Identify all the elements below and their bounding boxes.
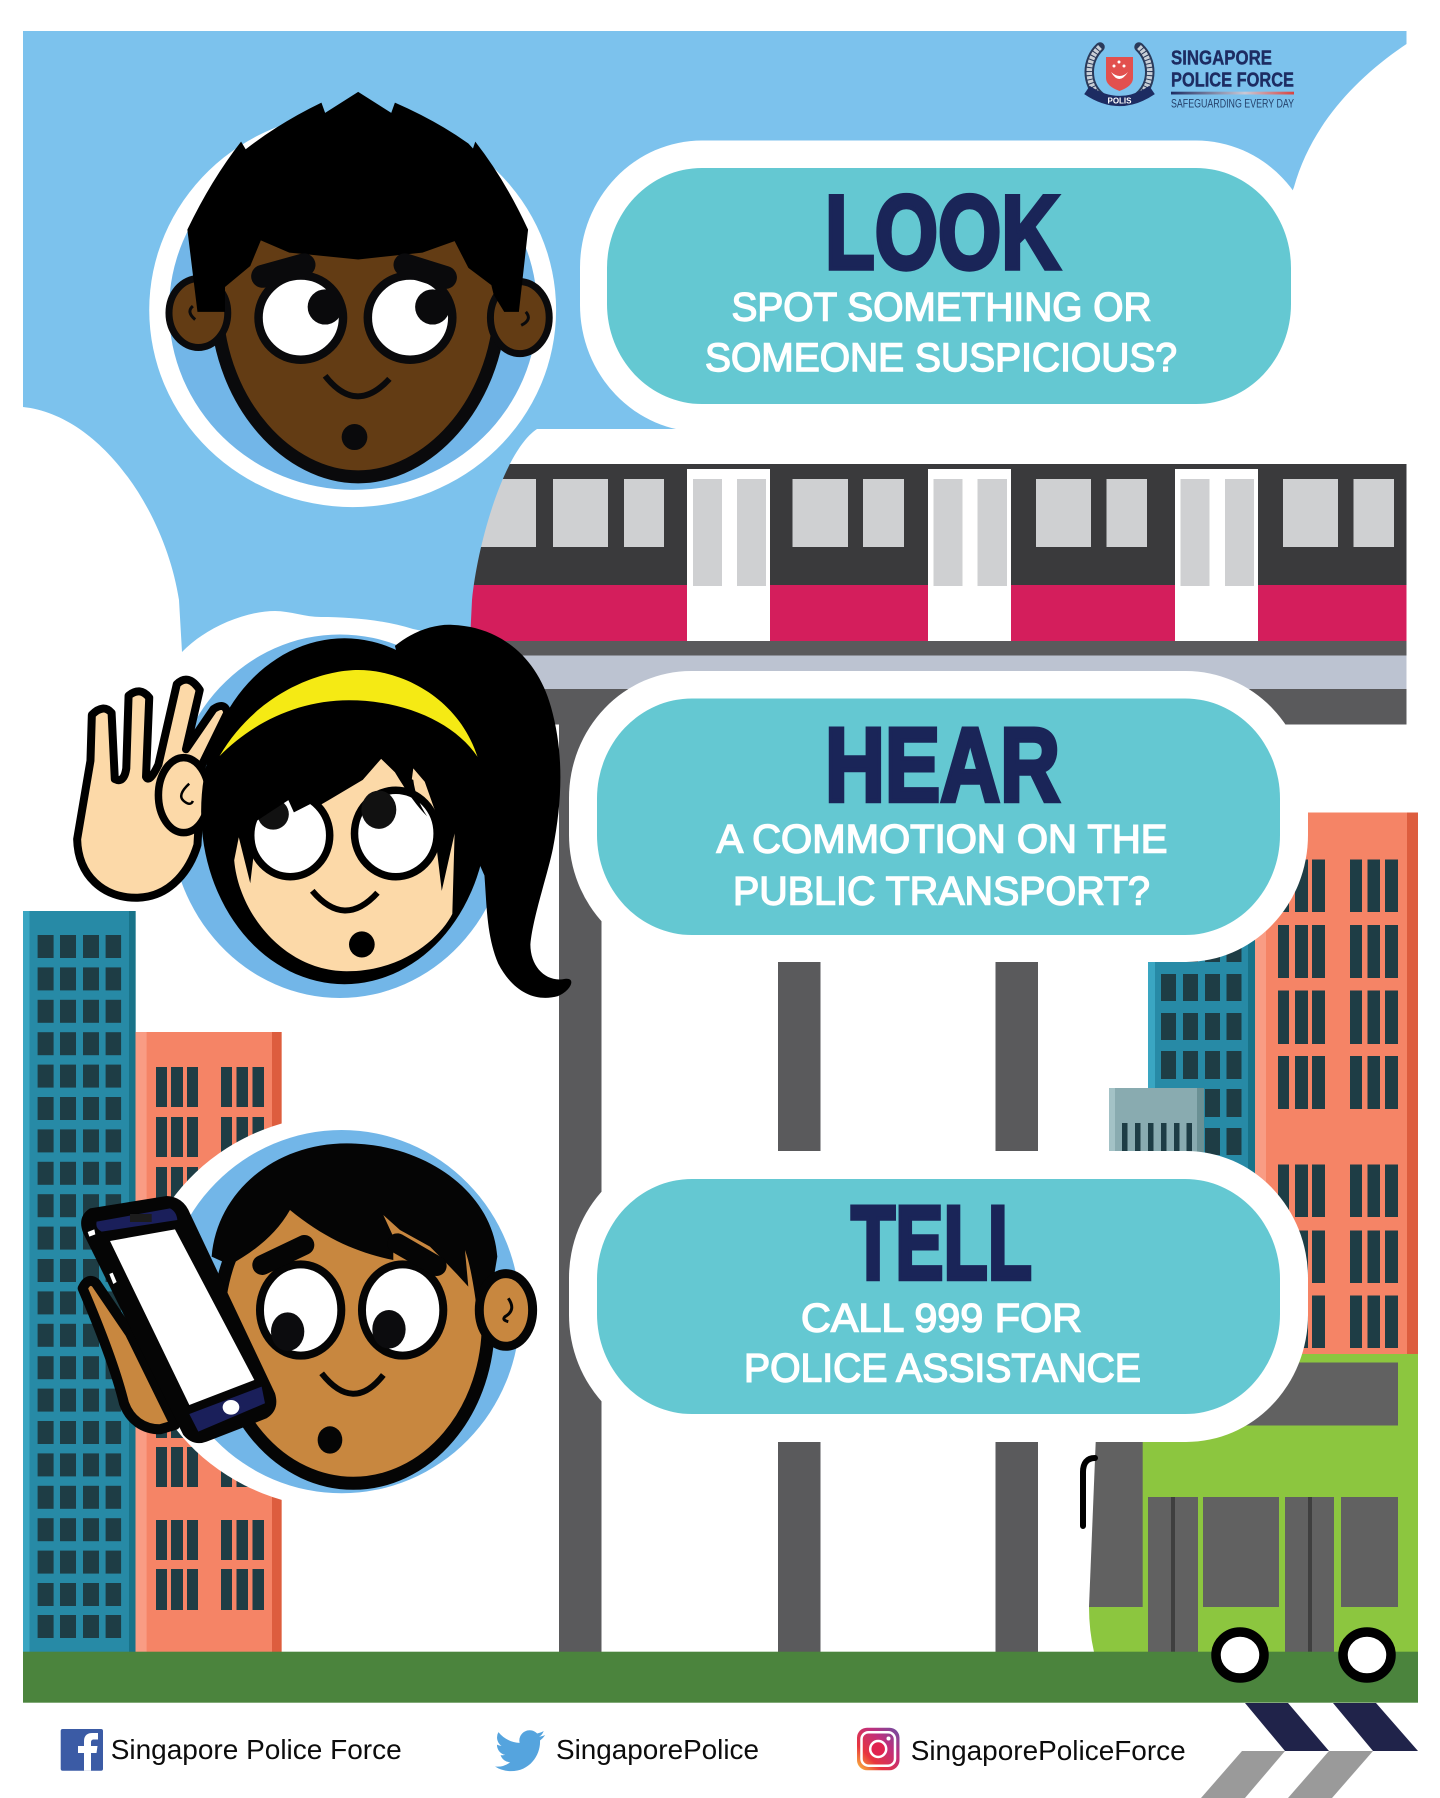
text: commotion line 2: PUBLIC TRANSPORT? [733, 870, 1150, 914]
text: call 999 line 1: CALL 999 FOR [801, 1296, 1082, 1340]
elevated rail viaduct [470, 641, 1406, 1652]
footer: social links [61, 1728, 1186, 1771]
sky with clouds [23, 31, 1406, 652]
icon: twitter [495, 1730, 545, 1771]
character: girl listening [77, 625, 571, 998]
road pillars [778, 962, 1038, 1652]
panel: HEAR [569, 671, 1308, 962]
heading: LOOK: LOOK [825, 174, 1060, 292]
chevron corner decoration [1201, 1703, 1418, 1798]
text: spot something line 2: SOMEONE SUSPICIOUS? [705, 336, 1177, 380]
text: SINGAPORE: SINGAPORE [1171, 46, 1272, 70]
MRT train [465, 464, 1406, 641]
logo: Singapore Police Force [1087, 46, 1294, 110]
icon: instagram [857, 1728, 900, 1770]
panel: TELL [569, 1151, 1308, 1442]
left salmon building [136, 1032, 282, 1652]
icon: cupped hand [77, 680, 227, 898]
left blue building [23, 911, 136, 1652]
heading: TELL: TELL [851, 1185, 1032, 1302]
character: boy looking [149, 92, 556, 507]
text: commotion line 1: A COMMOTION ON THE [716, 818, 1168, 862]
right blue building [1148, 900, 1255, 1200]
text: spot something line 1: SPOT SOMETHING OR [732, 286, 1152, 330]
ear [479, 1274, 533, 1346]
icon: police crest [1087, 47, 1152, 106]
green double-decker bus [1083, 1354, 1418, 1652]
ground strip [23, 1652, 1418, 1703]
icon: smartphone [81, 1196, 276, 1443]
text: facebook handle: Singapore Police Force [111, 1734, 402, 1765]
panel: LOOK [580, 140, 1318, 432]
text: tagline: SAFEGUARDING EVERY DAY [1171, 98, 1294, 110]
character: boy on phone [81, 1115, 548, 1508]
text: instagram handle: SingaporePoliceForce [911, 1735, 1186, 1766]
heading: HEAR: HEAR [825, 707, 1060, 824]
hair [212, 1143, 497, 1307]
text: POLICE FORCE: POLICE FORCE [1171, 68, 1294, 92]
icon: hand holding phone [83, 1281, 175, 1429]
divider bar [1171, 92, 1294, 94]
right salmon building [1255, 812, 1418, 1354]
bus wheels [1216, 1632, 1391, 1678]
icon: facebook [61, 1729, 103, 1771]
low grey building [1109, 1088, 1204, 1152]
text: twitter handle: SingaporePolice [556, 1734, 759, 1765]
text: call 999 line 2: POLICE ASSISTANCE [744, 1346, 1141, 1390]
icon: police crest: POLIS [1107, 96, 1132, 106]
